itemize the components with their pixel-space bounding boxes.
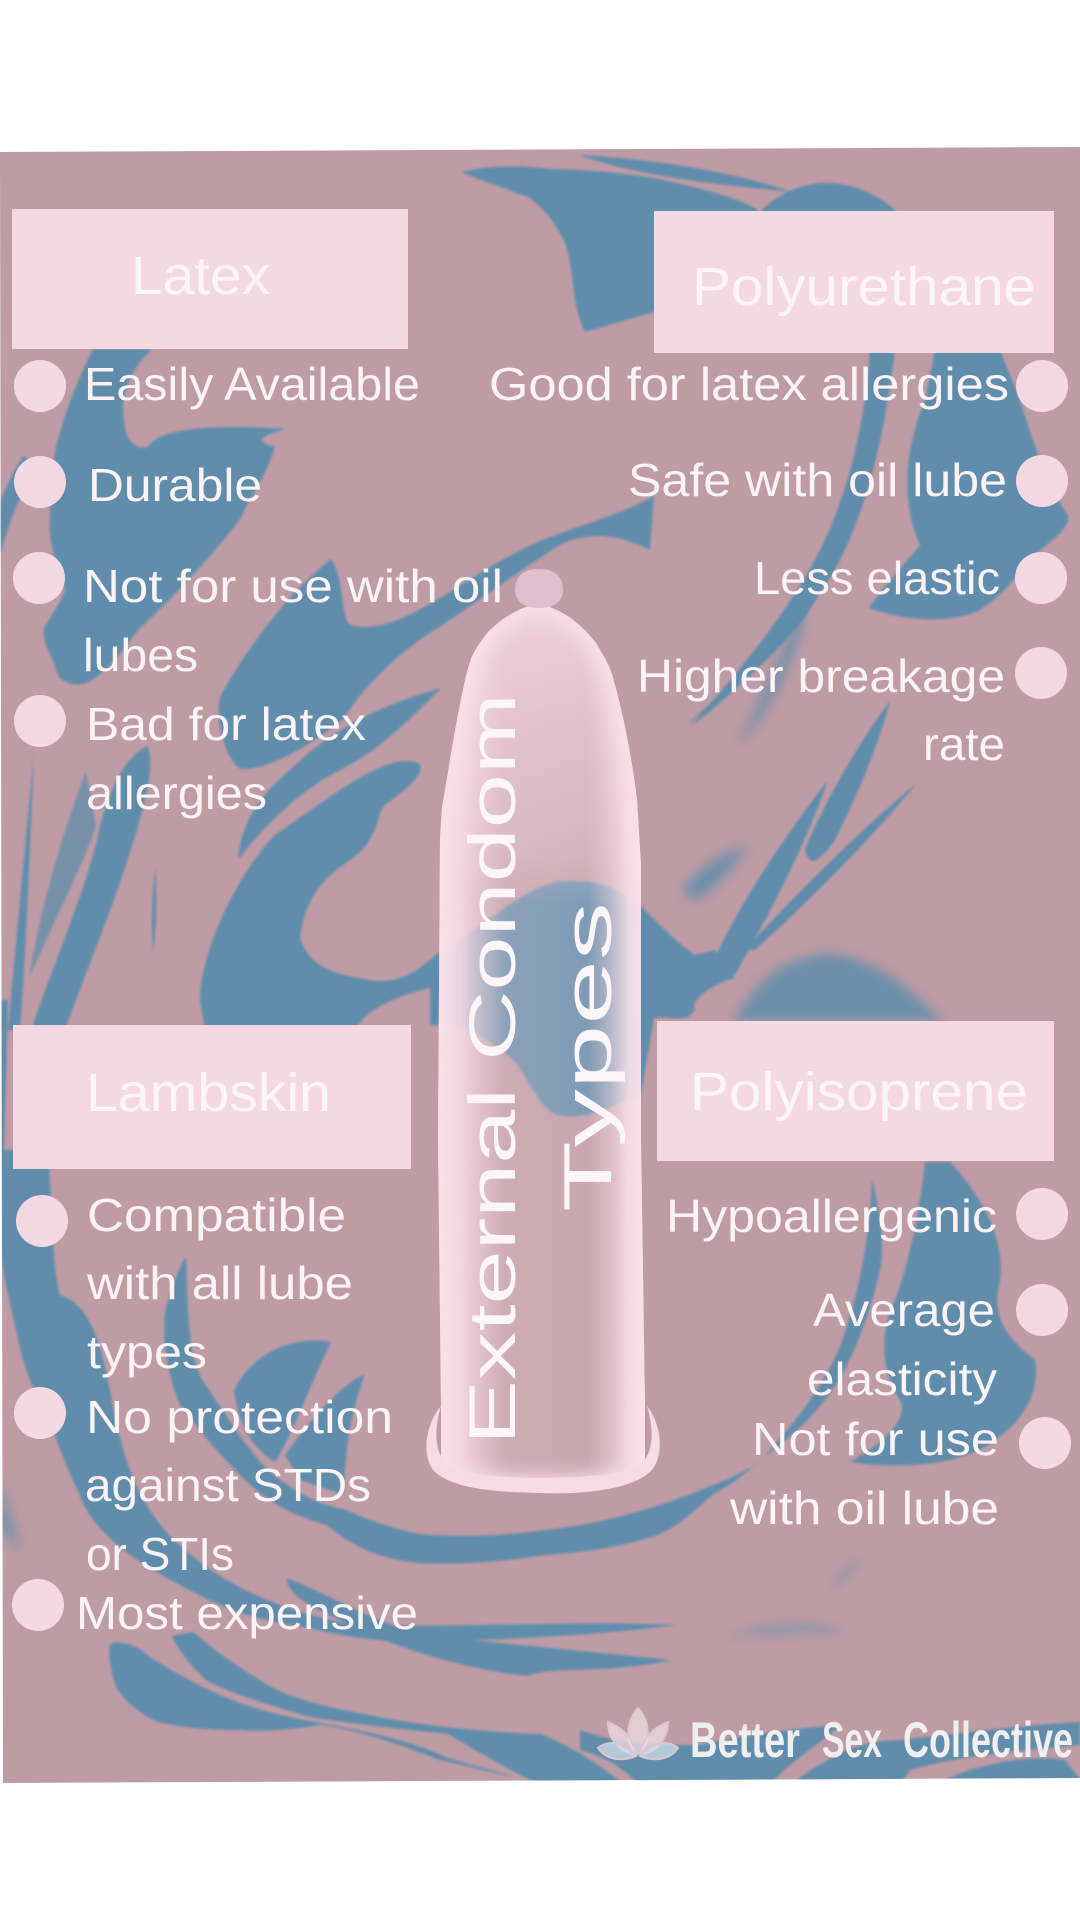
text: Latex list [83, 358, 503, 819]
text: Lambskin list [76, 1189, 418, 1639]
logo wordmark: Better [690, 1712, 800, 1768]
icon: lotus [598, 1708, 678, 1759]
bullets: Latex [13, 360, 66, 747]
logo: Better Sex Collective [598, 1708, 1073, 1768]
text: Polyurethane list [489, 358, 1009, 770]
logo wordmark: Sex [822, 1712, 882, 1768]
title: External Condom Types (vertical): External Condom [455, 693, 529, 1445]
text: Polyurethane list: Safe with oil lube [628, 454, 1007, 506]
text: Polyisoprene list: Hypoallergenic [666, 1190, 997, 1242]
text: Latex list: lubes [83, 629, 198, 681]
text: Polyisoprene list: elasticity [807, 1353, 997, 1405]
panel: Polyisoprene [657, 1021, 1071, 1534]
panel: Polyurethane [489, 211, 1068, 770]
title: External Condom Types (vertical) [455, 693, 626, 1445]
heading: Polyisoprene: Polyisoprene [690, 1062, 1028, 1122]
heading: Polyurethane [654, 211, 1054, 353]
condom body [438, 606, 645, 1478]
bullets: Polyisoprene [1016, 1188, 1071, 1469]
text: Lambskin list: Most expensive [76, 1587, 418, 1639]
text: Polyisoprene list: with oil lube [729, 1482, 999, 1534]
text: Lambskin list: or STIs [86, 1528, 234, 1580]
text: Lambskin list: No protection [86, 1391, 393, 1443]
condom reservoir tip [515, 569, 563, 608]
bullets: Polyurethane [1015, 360, 1068, 699]
heading: Polyisoprene [657, 1021, 1054, 1161]
text: Lambskin list: Compatible [87, 1189, 346, 1241]
text: Lambskin list: against STDs [85, 1459, 371, 1511]
text: Polyisoprene list: Average [813, 1284, 995, 1336]
panel: Lambskin [12, 1025, 418, 1639]
illustration: condom [426, 569, 660, 1500]
text: Latex list: Easily Available [84, 358, 420, 410]
text: Latex list: allergies [86, 767, 267, 819]
condom rim [426, 1406, 660, 1493]
logo wordmark [690, 1712, 1073, 1768]
heading: Latex [12, 209, 408, 349]
heading: Lambskin: Lambskin [86, 1063, 331, 1123]
text: Polyisoprene list: Not for use [752, 1413, 999, 1465]
heading: Latex: Latex [131, 246, 270, 306]
text: Polyurethane list: Good for latex allergies [489, 358, 1009, 410]
title: External Condom Types (vertical): Types [550, 902, 626, 1212]
text: Lambskin list: with all lube [86, 1257, 353, 1309]
text: Polyisoprene list [666, 1190, 999, 1534]
bullets: Lambskin [12, 1195, 68, 1631]
text: Latex list: Bad for latex [86, 698, 366, 750]
text: Polyurethane list: Higher breakage [637, 650, 1005, 702]
text: Polyurethane list: rate [923, 718, 1005, 770]
heading: Polyurethane: Polyurethane [692, 257, 1036, 317]
heading: Lambskin [13, 1025, 411, 1169]
text: Polyurethane list: Less elastic [754, 552, 1000, 604]
text: Lambskin list: types [87, 1326, 207, 1378]
text: Latex list: Durable [88, 459, 262, 511]
text: Latex list: Not for use with oil [83, 560, 503, 612]
panel: Latex [12, 209, 503, 819]
